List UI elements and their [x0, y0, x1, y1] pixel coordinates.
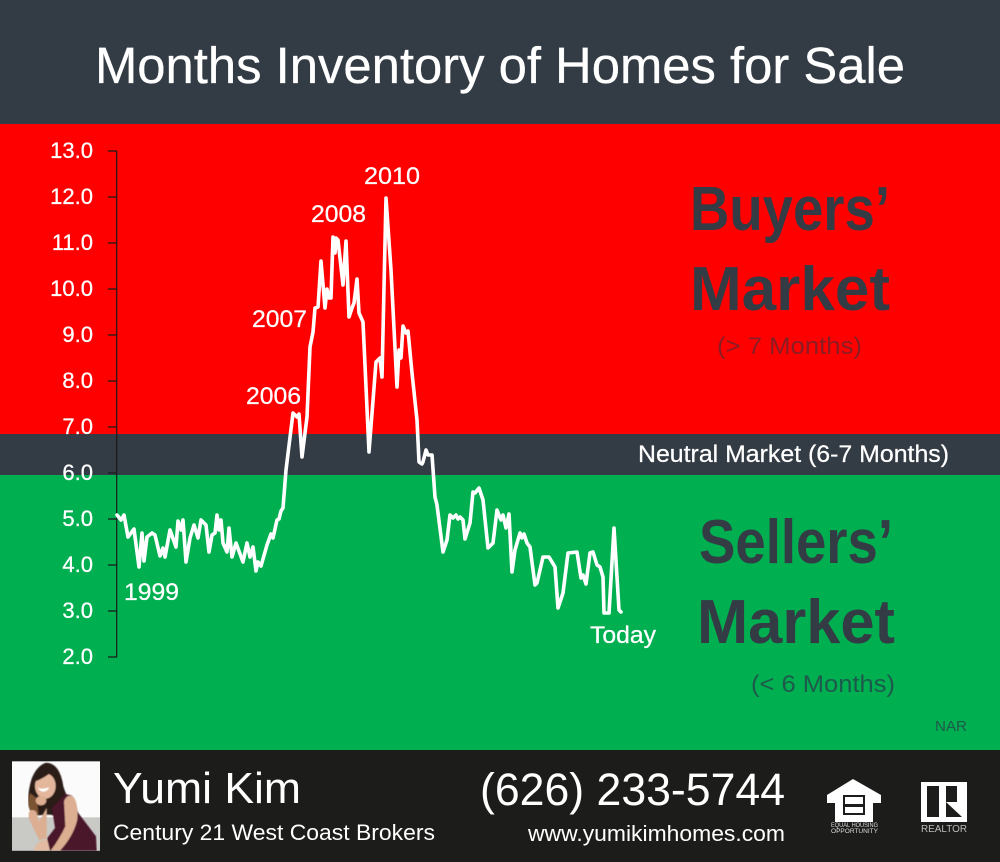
axis labels: 4.0	[62, 552, 93, 577]
text: source: NAR	[935, 718, 967, 735]
axis labels: 8.0	[62, 368, 93, 393]
axis labels: 5.0	[62, 506, 93, 531]
axis labels: 9.0	[62, 322, 93, 347]
axis labels	[50, 138, 93, 669]
axis labels: 2.0	[62, 644, 93, 669]
brokerage: Century 21 West Coast Brokers	[113, 820, 435, 845]
icon: realtor	[921, 782, 967, 835]
year labels	[124, 163, 656, 649]
title: Months Inventory of Homes for Sale	[95, 37, 905, 94]
heading: sellers: Sellers’	[699, 508, 893, 577]
header band	[0, 0, 1000, 124]
heading: buyers: Buyers’	[690, 175, 890, 244]
text: over seven months: (> 7 Months)	[717, 333, 862, 360]
panel: buyers market band	[0, 124, 1000, 434]
heading: sellers market: Market	[697, 588, 895, 657]
icon: equal housing opportunity: OPPORTUNITY	[831, 828, 879, 835]
text: under six months: (< 6 Months)	[751, 671, 895, 698]
chart: months inventory line	[50, 138, 656, 669]
year labels: 2007	[252, 306, 307, 333]
axis labels: 13.0	[50, 138, 93, 163]
agent name: Yumi Kim	[113, 764, 301, 813]
year labels: 2010	[364, 163, 420, 190]
chart axis	[108, 151, 117, 657]
website: www.yumikimhomes.com	[527, 821, 785, 846]
axis labels: 6.0	[62, 460, 93, 485]
year labels: 1999	[124, 579, 179, 606]
data line	[117, 198, 621, 613]
phone number: (626) 233-5744	[480, 764, 785, 815]
axis labels: 7.0	[62, 414, 93, 439]
icon: equal housing opportunity	[827, 779, 881, 835]
panel: neutral market band	[0, 434, 1000, 475]
axis labels: 10.0	[50, 276, 93, 301]
icon: equal housing opportunity: EQUAL HOUSING	[831, 822, 878, 829]
year labels: 2008	[311, 201, 366, 228]
panel: sellers market band	[0, 475, 1000, 750]
icon: realtor: REALTOR	[921, 823, 967, 835]
heading: buyers market: Market	[690, 255, 890, 324]
axis labels: 11.0	[52, 230, 93, 255]
year labels: Today	[590, 622, 656, 649]
axis labels: 3.0	[62, 598, 93, 623]
footer band	[0, 750, 1000, 862]
agent photo	[12, 761, 100, 851]
axis labels: 12.0	[50, 184, 93, 209]
year labels: 2006	[246, 383, 301, 410]
text: neutral market: Neutral Market (6-7 Months)	[638, 441, 949, 468]
